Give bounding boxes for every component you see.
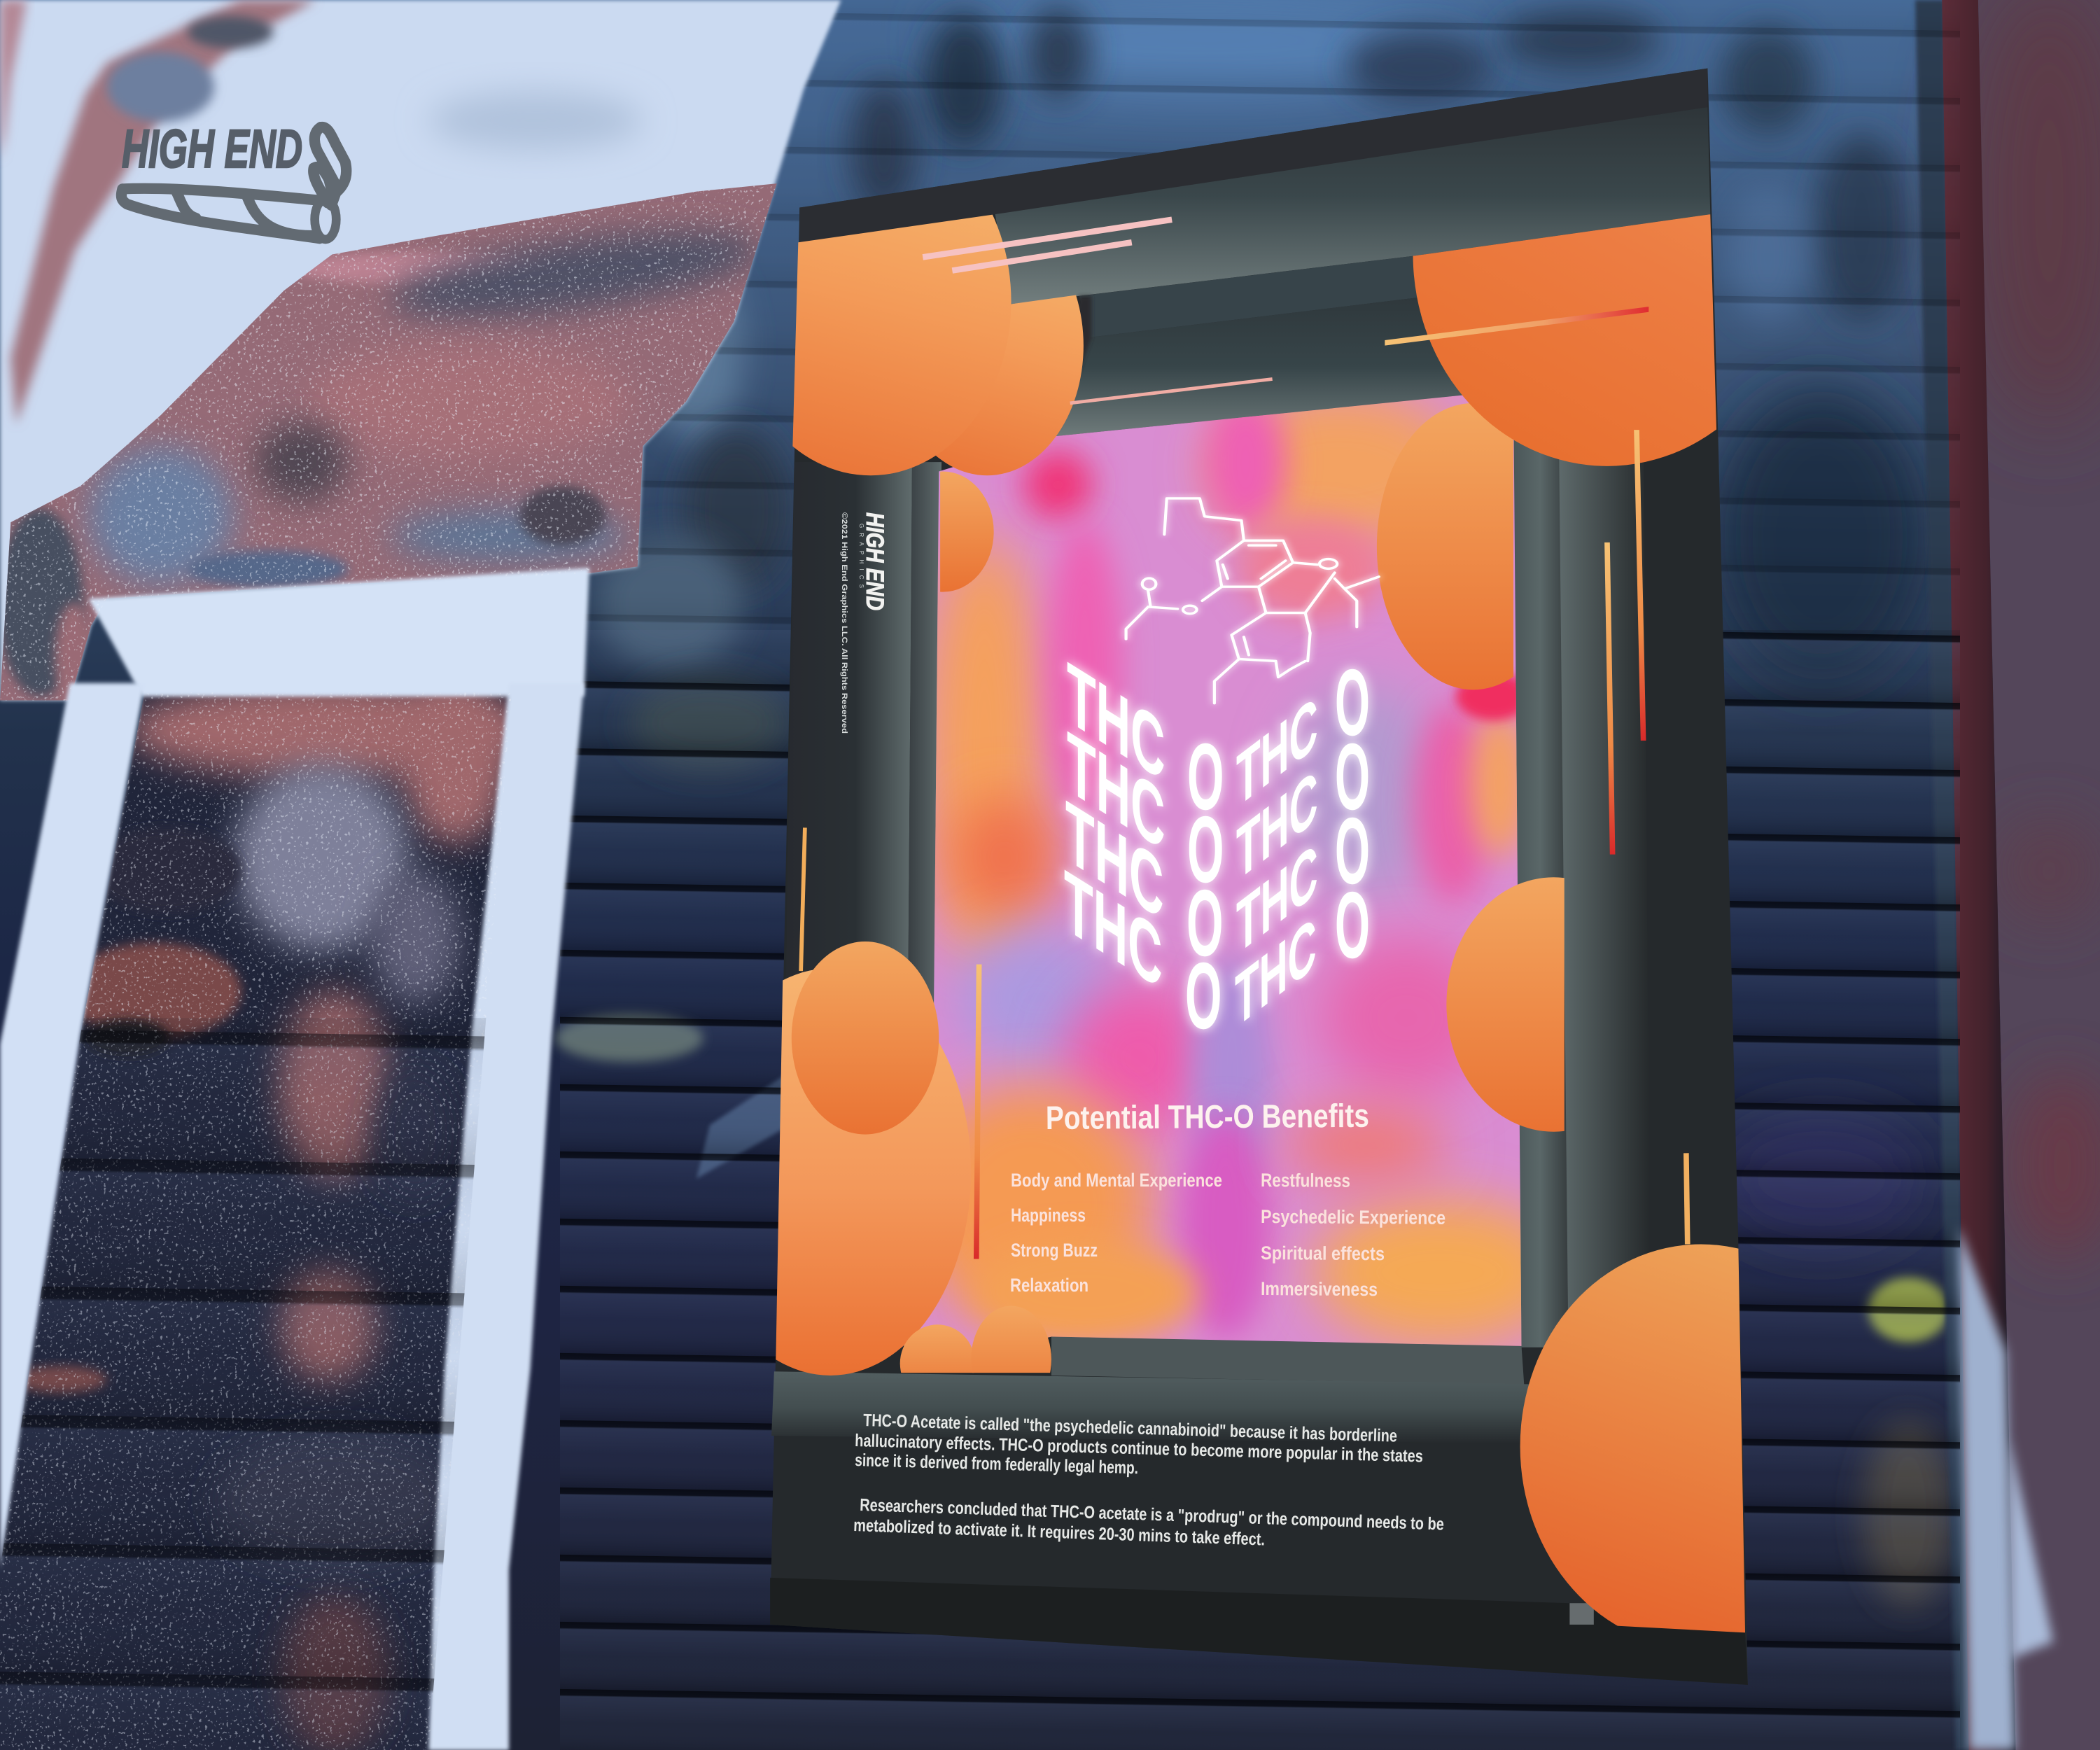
brand sub-label: GRAPHICS (858, 524, 864, 588)
row 2: O (1335, 724, 1370, 830)
background: tree reflections (556, 0, 1954, 1607)
benefits list: right column: Psychedelic Experience (1261, 1206, 1446, 1228)
background: blinds over window (560, 630, 1960, 1750)
sphere: bottom-right (1520, 1244, 1882, 1648)
row 4 (1064, 850, 1370, 1049)
benefits list: left column (1010, 1170, 1222, 1296)
benefits list: right column (1261, 1170, 1446, 1300)
benefits list: right column: Restfulness (1261, 1170, 1350, 1191)
graffiti: speckle on red field (0, 174, 804, 710)
row 3: THC (1065, 781, 1163, 939)
benefits list: right column: Immersiveness (1261, 1278, 1378, 1300)
graffiti: mauve-red field (0, 174, 804, 710)
description paragraph 1: THC-O Acetate is called "the psychedelic cannabinoid" because it has borderline (863, 1410, 1397, 1446)
description paragraph 2 (853, 1495, 1444, 1550)
background: mauve wall at right (1969, 0, 2100, 1750)
row 3: THC (1236, 827, 1318, 971)
row 3: O (1335, 799, 1370, 904)
row 4: THC (1235, 901, 1317, 1044)
row 1: O (1335, 650, 1370, 755)
poster: right frame columns (1512, 388, 1650, 1348)
poster side branding (840, 512, 888, 734)
sphere: small left (892, 471, 994, 592)
sphere: large right on art (1377, 403, 1569, 690)
copyright: ©2021 High End Graphics LLC. All Rights Reserved (840, 512, 848, 734)
brand name: HIGH END (861, 512, 888, 610)
row 3: O (1186, 869, 1224, 976)
graffiti: speckle on inner field (0, 670, 536, 1750)
logo: High End with joint icon (121, 119, 346, 239)
graffiti: blind lines seen through lower field (0, 1018, 486, 1715)
poster: top dark strip (799, 69, 1707, 242)
sphere: top-left rear (890, 216, 1084, 475)
row 2: O (1187, 796, 1224, 902)
decor: orange spheres (690, 43, 1882, 1648)
graffiti: upper left diagonal stripe (0, 0, 643, 425)
poster: top frame bands (995, 107, 1710, 437)
benefits list: left column: Relaxation (1010, 1275, 1088, 1296)
row 1 (1067, 643, 1370, 830)
poster: bottom frame bands (770, 1336, 1748, 1685)
sphere: large bottom-left (690, 968, 971, 1376)
benefits list: left column: Happiness (1011, 1205, 1086, 1226)
graffiti: white frame left leg (0, 683, 145, 1569)
benefits list: right column: Spiritual effects (1261, 1242, 1385, 1264)
poster art: gradient field (884, 375, 1567, 1366)
row 2: THC (1067, 712, 1165, 869)
row 1: THC (1067, 643, 1165, 800)
poster: left frame columns (786, 462, 941, 1058)
heading: Potential THC-O Benefits: Potential THC-O Benefits (1046, 1097, 1369, 1136)
sphere: top-left front (730, 127, 1011, 475)
row 1: O (1187, 723, 1224, 830)
description paragraph 1: since it is derived from federally legal hemp. (855, 1450, 1138, 1478)
benefits list: left column: Body and Mental Experience (1011, 1170, 1222, 1191)
molecule diagram (1126, 498, 1379, 704)
decor: accent lines (801, 220, 1688, 1259)
graffiti: inner dark and red field (26, 694, 509, 1750)
logo wordmark: HIGH END (122, 119, 302, 179)
row 4: THC (1064, 850, 1162, 1008)
graffiti: white upper field (0, 0, 841, 701)
sphere: small bottom pair (900, 1306, 1051, 1413)
description paragraph 2: Researchers concluded that THC-O acetate is a "prodrug" or the compound needs to be (860, 1495, 1444, 1534)
description paragraph 1: hallucinatory effects. THC-O products continue to become more popular in the states (855, 1431, 1423, 1466)
row 3 (1065, 781, 1370, 976)
background: window frame (1915, 0, 2053, 1750)
row 2: THC (1236, 754, 1318, 897)
sphere: small bottom-left overlay (792, 941, 939, 1135)
row 1: THC (1236, 680, 1318, 824)
benefits list: left column: Strong Buzz (1011, 1240, 1098, 1261)
poster (770, 69, 1748, 1685)
graffiti: white frame top band (88, 568, 589, 696)
description paragraph 1 (855, 1410, 1423, 1478)
icon: joint with smoke (121, 127, 346, 239)
row 4: O (1185, 942, 1222, 1049)
poster: dark base sheet (770, 69, 1748, 1685)
sphere: top-right (1413, 43, 1801, 466)
row 4: O (1335, 873, 1370, 978)
description paragraph 2: metabolized to activate it. It requires 20-30 mins to take effect. (853, 1516, 1265, 1550)
sphere: right middle (1446, 877, 1660, 1132)
wrapped THC-O text cube (1064, 643, 1370, 1049)
row 2 (1067, 712, 1370, 902)
graffiti: white frame right leg (428, 683, 584, 1750)
